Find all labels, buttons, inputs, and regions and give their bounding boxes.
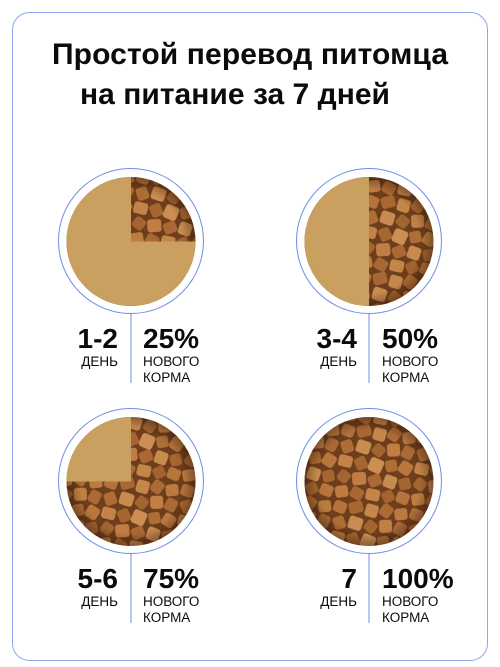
- percentage caption: НОВОГО: [143, 354, 199, 369]
- pie: old food 75%: [66, 177, 196, 306]
- ring: [58, 408, 204, 554]
- divider line: [130, 313, 132, 383]
- kibble circle base: [304, 417, 434, 546]
- day number: 3-4: [317, 323, 357, 354]
- panel: day 7: [296, 408, 454, 625]
- day number: 5-6: [78, 563, 118, 594]
- vignette: [304, 177, 434, 306]
- title: Простой перевод питомца: [52, 38, 448, 71]
- percentage caption: КОРМА: [143, 610, 190, 625]
- percentage caption: КОРМА: [382, 610, 429, 625]
- percentage: 75%: [143, 563, 199, 594]
- kibble circle base: [66, 417, 196, 546]
- percentage caption: НОВОГО: [143, 594, 199, 609]
- vignette: [304, 417, 434, 546]
- percentage: 100%: [382, 563, 454, 594]
- divider line: [368, 313, 370, 383]
- pie: old food 50%: [304, 177, 369, 306]
- divider line: [368, 553, 370, 623]
- pie: old food 25%: [66, 417, 131, 482]
- ring: [296, 408, 442, 554]
- ring: [296, 168, 442, 314]
- day number: 1-2: [78, 323, 118, 354]
- kibble circle base: [304, 177, 434, 306]
- percentage: 25%: [143, 323, 199, 354]
- title: [52, 38, 448, 111]
- title: на питание за 7 дней: [80, 78, 390, 111]
- kibble circle base: [66, 177, 196, 306]
- panel: day 3-4: [296, 168, 442, 385]
- vignette: [66, 177, 196, 306]
- percentage: 50%: [382, 323, 438, 354]
- percentage caption: КОРМА: [143, 370, 190, 385]
- percentage caption: НОВОГО: [382, 594, 438, 609]
- divider line: [130, 553, 132, 623]
- panel: day 5-6: [58, 408, 204, 625]
- panel: day 1-2: [58, 168, 204, 385]
- day label: ДЕНЬ: [81, 354, 118, 369]
- ring: [58, 168, 204, 314]
- day label: ДЕНЬ: [81, 594, 118, 609]
- day label: ДЕНЬ: [320, 354, 357, 369]
- percentage caption: КОРМА: [382, 370, 429, 385]
- day number: 7: [341, 563, 357, 594]
- day label: ДЕНЬ: [320, 594, 357, 609]
- vignette: [66, 417, 196, 546]
- percentage caption: НОВОГО: [382, 354, 438, 369]
